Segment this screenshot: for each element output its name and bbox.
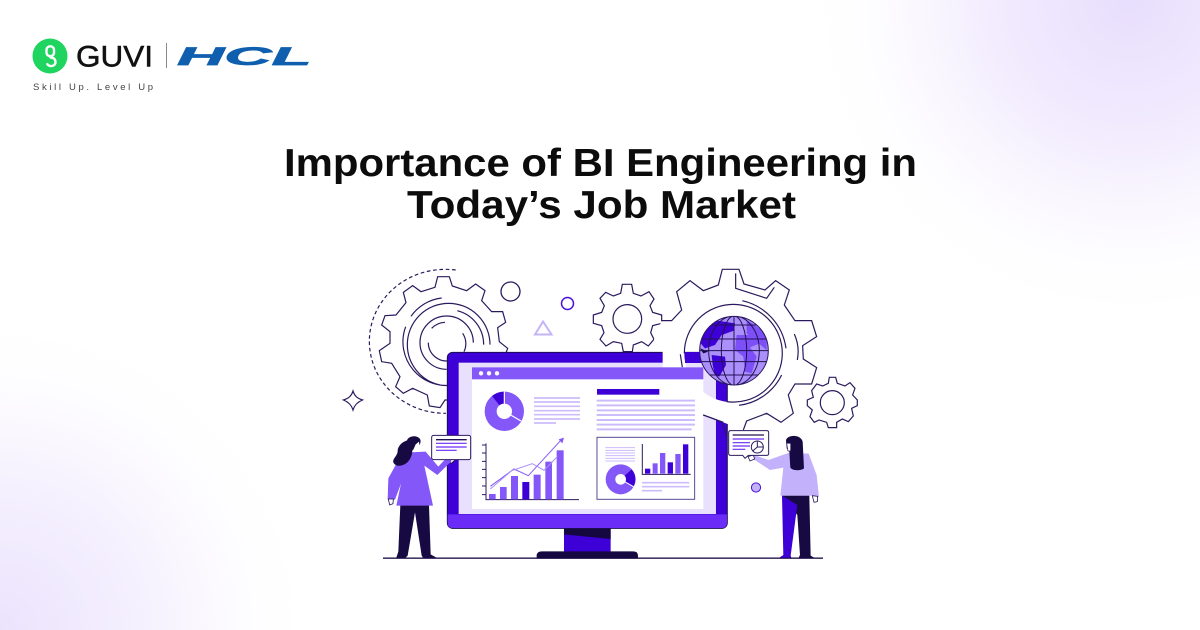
hand bbox=[448, 456, 456, 464]
icon: GUVI green circle bbox=[32, 38, 68, 74]
GUVI wordmark: GUVI bbox=[76, 40, 153, 74]
ground line bbox=[383, 558, 823, 559]
continents bbox=[698, 320, 767, 377]
face bbox=[787, 443, 791, 451]
monitor bbox=[447, 352, 727, 559]
card caption lines bbox=[642, 483, 689, 491]
text lines top left bbox=[534, 398, 580, 423]
speech card left bbox=[432, 435, 471, 460]
decorative circle purple bbox=[562, 298, 574, 310]
decorative triangle bbox=[535, 322, 552, 334]
illustration bbox=[344, 269, 857, 559]
small gear bbox=[593, 284, 662, 352]
large gear front edge over screen bbox=[703, 415, 727, 437]
heading bar bbox=[597, 389, 659, 395]
logo: GUVI HCL bbox=[32, 38, 312, 93]
title: Today’s Job Market bbox=[407, 184, 796, 227]
monitor screen bbox=[459, 363, 716, 514]
dashed orbit bbox=[369, 269, 456, 413]
logo divider bbox=[166, 43, 167, 68]
title bbox=[284, 142, 917, 227]
tagline: Skill Up. Level Up bbox=[33, 82, 153, 93]
legs bbox=[396, 505, 436, 558]
face bbox=[413, 442, 420, 451]
donut chart top bbox=[485, 392, 524, 431]
left hand bbox=[388, 499, 393, 505]
text lines top right bbox=[597, 401, 695, 429]
dark trouser leg bbox=[782, 496, 814, 558]
decorative sparkle bbox=[344, 391, 362, 410]
mini pie icon bbox=[751, 441, 763, 453]
person right bbox=[748, 436, 819, 558]
hair bbox=[393, 436, 421, 466]
blue trouser leg bbox=[779, 496, 797, 558]
left gear with rings bbox=[369, 269, 508, 413]
speech card right bbox=[729, 431, 769, 458]
decorative circle dark bbox=[501, 282, 520, 301]
hair bbox=[786, 436, 804, 470]
card donut bbox=[606, 464, 636, 494]
panel background bbox=[472, 367, 703, 509]
torso and arms bbox=[388, 452, 452, 506]
monitor base bbox=[537, 551, 638, 559]
decorative circle lilac bbox=[751, 483, 761, 492]
monitor frame bbox=[447, 352, 727, 528]
globe grid bbox=[700, 316, 768, 384]
report card bbox=[597, 437, 695, 499]
hand bbox=[748, 455, 755, 461]
large gear bbox=[654, 269, 817, 430]
window title bar bbox=[472, 367, 703, 379]
monitor chin bbox=[448, 514, 727, 528]
monitor top bar seen through gear bbox=[685, 352, 703, 363]
line and bar chart bbox=[482, 438, 579, 500]
globe bbox=[697, 315, 772, 387]
gear small right bbox=[807, 377, 857, 428]
shirt bbox=[753, 453, 819, 497]
HCL wordmark: HCL bbox=[177, 42, 312, 71]
title: Importance of BI Engineering in bbox=[284, 142, 917, 185]
monitor stand bbox=[564, 527, 611, 553]
person left bbox=[388, 436, 456, 558]
card bar chart bbox=[642, 444, 691, 474]
card text lines bbox=[605, 448, 635, 461]
dashboard screen bbox=[472, 367, 703, 509]
